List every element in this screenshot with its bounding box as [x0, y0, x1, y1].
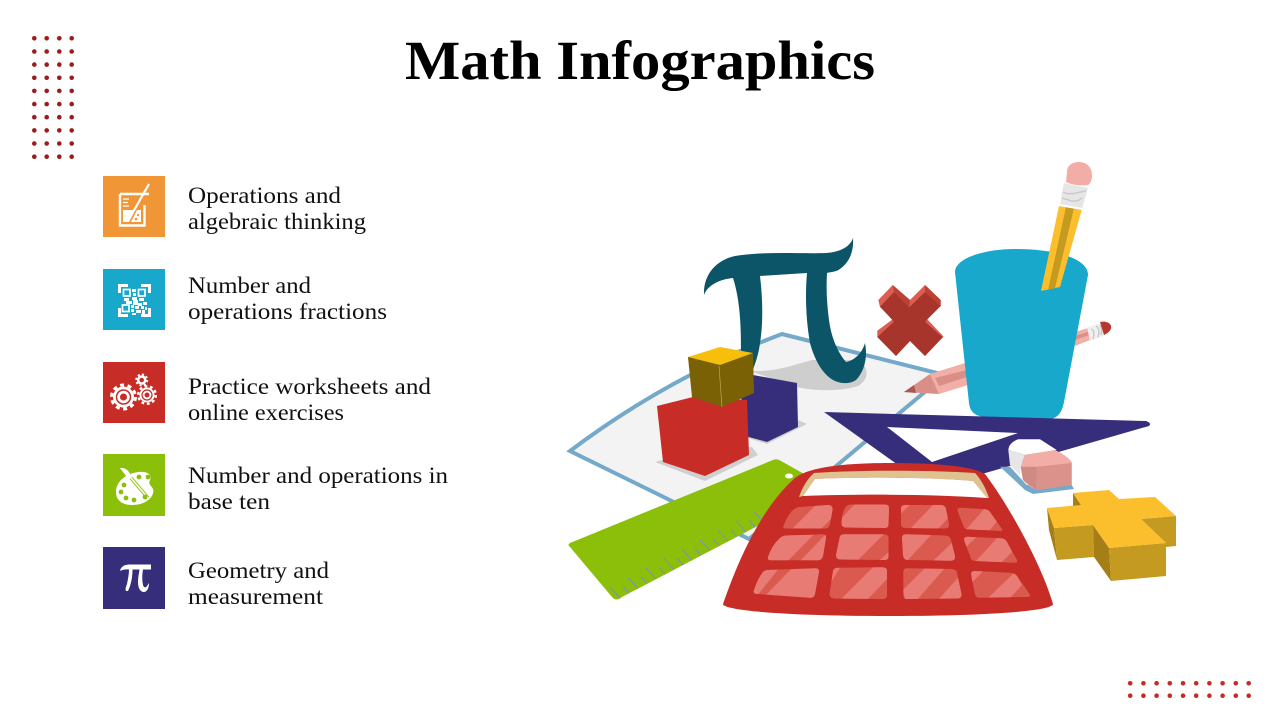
- text: number and operations in base ten: base ten: [188, 489, 271, 514]
- blue cup: [955, 249, 1088, 419]
- text: number and operations in base ten: Number and operations in: [188, 463, 449, 488]
- calculator keys: [750, 500, 1034, 602]
- olive and yellow cube: [688, 347, 754, 407]
- list item: number and operations fractions: [103, 269, 387, 330]
- red calculator: [723, 463, 1053, 616]
- yellow plus sign: [1047, 490, 1176, 581]
- icon: qr code: [103, 269, 165, 330]
- text: practice worksheets and online exercises: online exercises: [188, 400, 344, 425]
- decorative dot grid: bottom right: [1128, 681, 1251, 698]
- text: number and operations fractions: [188, 273, 387, 324]
- pink pencil behind cup: [904, 322, 1111, 394]
- eraser on blue tray: [1000, 439, 1074, 494]
- pi shadow: [750, 360, 867, 390]
- text: operations and algebraic thinking: Operations and: [188, 183, 342, 208]
- text: operations and algebraic thinking: [188, 183, 367, 234]
- ruler ticks: [610, 511, 764, 598]
- text: number and operations fractions: operations fractions: [188, 299, 387, 324]
- paper sheet: [570, 334, 945, 539]
- text: practice worksheets and online exercises: Practice worksheets and: [188, 374, 432, 399]
- icon: paint palette: [103, 454, 165, 516]
- text: geometry and measurement: measurement: [188, 584, 324, 609]
- large pi symbol: [704, 238, 866, 383]
- text: practice worksheets and online exercises: [188, 374, 432, 425]
- purple set square: [824, 412, 1150, 476]
- icon: gears: [103, 362, 165, 423]
- list item: practice worksheets and online exercises: [103, 362, 432, 425]
- yellow pencil in cup: [1041, 162, 1092, 291]
- text: number and operations in base ten: [188, 463, 449, 514]
- green ruler: [568, 459, 815, 600]
- list item: number and operations in base ten: [103, 454, 449, 516]
- calculator screen: [799, 471, 989, 498]
- red multiplication sign: [877, 285, 944, 356]
- illustration: math objects: [568, 162, 1176, 616]
- text: geometry and measurement: [188, 558, 330, 609]
- icon: beaker and pencil: [103, 176, 165, 237]
- text: operations and algebraic thinking: algebraic thinking: [188, 209, 367, 234]
- text: number and operations fractions: Number and: [188, 273, 312, 298]
- decorative dot grid: top left: [32, 36, 74, 159]
- list item: operations and algebraic thinking: [103, 176, 367, 237]
- purple cube: [740, 375, 807, 444]
- title: Math Infographics: [405, 30, 875, 91]
- icon: pi symbol: [103, 547, 165, 609]
- red cube: [655, 397, 758, 481]
- text: geometry and measurement: Geometry and: [188, 558, 330, 583]
- list item: geometry and measurement: [103, 547, 330, 609]
